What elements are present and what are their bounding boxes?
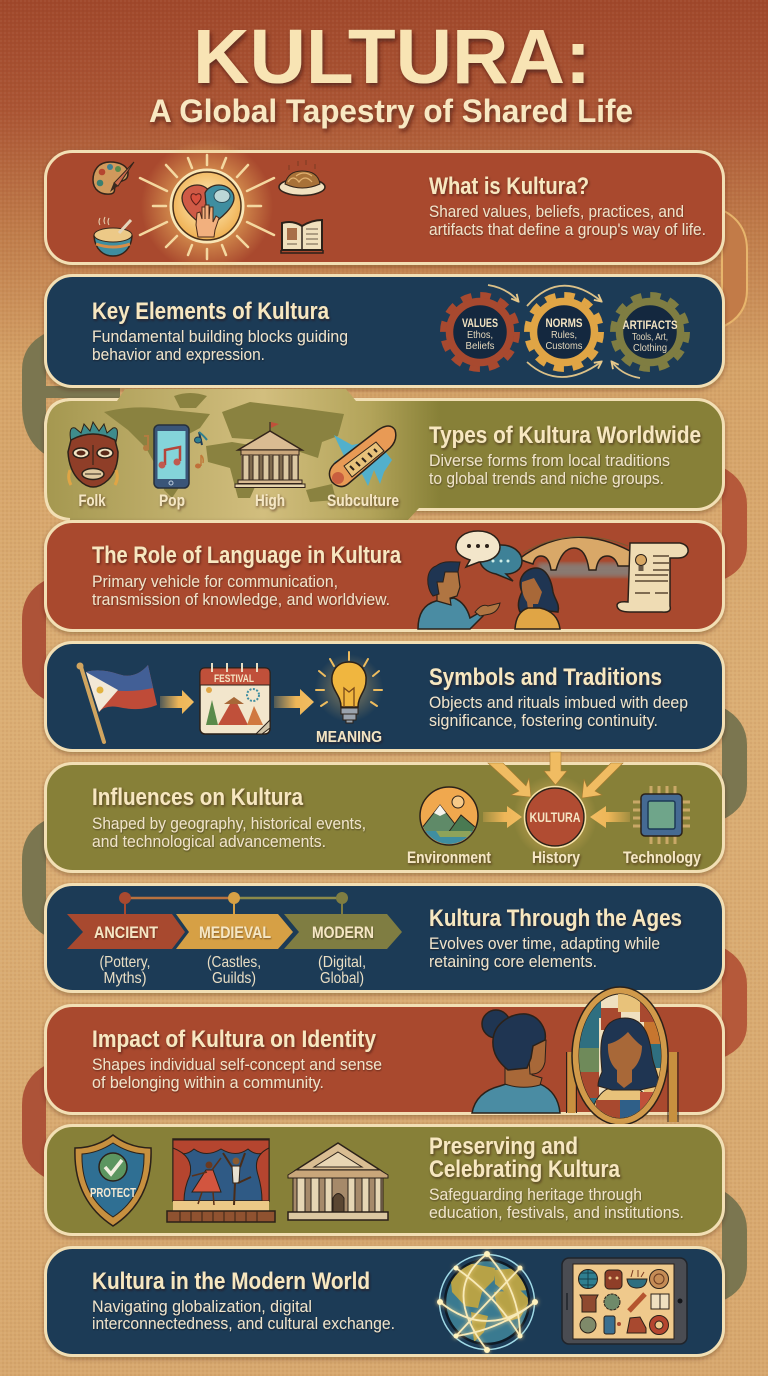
side ribbons <box>22 210 747 1301</box>
text: modern world: Kultura in the Modern World <box>92 1268 370 1295</box>
chevron: modern <box>284 914 402 949</box>
panel: influences <box>46 752 724 872</box>
icon: values gear: VALUES <box>462 316 498 330</box>
icon: philippine flag <box>76 662 157 742</box>
text: role of language: The Role of Language in Kultura <box>92 542 402 569</box>
icon: protect shield <box>75 1135 151 1226</box>
icon: scroll document <box>617 543 688 612</box>
era examples: Guilds) <box>212 970 256 987</box>
text: influences: Influences on Kultura <box>92 784 304 811</box>
text: influences: and technological advancements. <box>92 832 326 851</box>
text: types worldwide: Diverse forms from local traditions <box>429 451 670 470</box>
icon: artifacts gear: Tools, Art, <box>632 332 668 343</box>
panel: types worldwide <box>46 389 724 521</box>
icon: artifacts gear: ARTIFACTS <box>622 318 678 332</box>
icon: norms gear <box>527 295 601 369</box>
arrow: flag to festival <box>160 690 194 714</box>
chevron: medieval <box>176 914 293 949</box>
icon: networked globe <box>437 1251 538 1353</box>
text: role of language: transmission of knowledge, and worldview. <box>92 590 390 609</box>
chevron: modern: MODERN <box>312 923 374 942</box>
main title: KULTURA: <box>193 14 591 100</box>
era examples: (Pottery, <box>100 954 150 971</box>
world map <box>46 389 440 521</box>
text: role of language: Primary vehicle for communication, <box>92 572 338 591</box>
arrows: converging influences <box>488 752 623 798</box>
text: modern world <box>92 1268 395 1333</box>
labels: culture types <box>78 492 399 510</box>
text: preserving and celebrating <box>429 1133 684 1222</box>
labels: influences <box>407 849 702 867</box>
icon: light bulb with rays <box>315 652 383 723</box>
figure: woman listening <box>515 568 560 629</box>
text: types worldwide: to global trends and niche groups. <box>429 469 664 488</box>
text: modern world: interconnectedness, and cultural exchange. <box>92 1314 395 1333</box>
era examples: Global) <box>320 970 364 987</box>
icon: norms gear: Customs <box>546 341 582 352</box>
text: influences: Shaped by geography, historical events, <box>92 814 366 833</box>
timeline connector <box>119 892 348 915</box>
subtitle: A Global Tapestry of Shared Life <box>149 93 633 129</box>
era examples <box>100 954 366 987</box>
text: what is kultura <box>429 173 706 239</box>
icon: tablet with cultural apps <box>562 1258 687 1344</box>
labels: culture types: High <box>255 492 285 510</box>
text: impact on identity: Shapes individual self-concept and sense <box>92 1055 382 1074</box>
text: impact on identity <box>92 1026 382 1092</box>
text: preserving and celebrating: Preserving and <box>429 1133 578 1160</box>
text: impact on identity: of belonging within a community. <box>92 1073 324 1092</box>
text: types worldwide: Types of Kultura Worldwide <box>429 422 701 449</box>
icon: glowing heart and mind <box>140 140 274 272</box>
text: impact on identity: Impact of Kultura on Identity <box>92 1026 377 1053</box>
text: what is kultura: artifacts that define a group's way of life. <box>429 220 706 239</box>
icon: norms gear: NORMS <box>546 316 582 330</box>
icon: phone with music <box>143 425 207 488</box>
text: what is kultura: What is Kultura? <box>429 173 589 200</box>
era examples: (Castles, <box>207 954 261 971</box>
text: modern world: Navigating globalization, digital <box>92 1297 312 1316</box>
panel: preserving and celebrating <box>46 1126 724 1234</box>
arrow: festival to meaning <box>274 689 314 715</box>
icon: artifacts gear <box>613 295 687 369</box>
labels: culture types: Pop <box>159 492 185 510</box>
panel: through the ages <box>46 884 724 992</box>
icon: values gear: Beliefs <box>466 341 494 352</box>
text: through the ages: retaining core elements. <box>429 952 597 971</box>
text: symbols and traditions: significance, fostering continuity. <box>429 711 658 730</box>
panel: symbols and traditions <box>46 642 724 750</box>
icon: tribal mask <box>68 422 118 487</box>
text: preserving and celebrating: education, festivals, and institutions. <box>429 1203 684 1222</box>
icon: norms gear: Rules, <box>551 330 577 341</box>
text: influences <box>92 784 366 851</box>
labels: influences: History <box>532 849 581 867</box>
era examples: Myths) <box>104 970 146 987</box>
panel: impact on identity <box>46 987 724 1125</box>
icon: pasta plate <box>279 160 325 196</box>
icon: kultura center: KULTURA <box>530 810 581 825</box>
panel: role of language <box>46 522 724 630</box>
arrows: gear cycle <box>488 285 640 378</box>
title <box>149 14 633 129</box>
icon: artifacts gear: Clothing <box>633 343 667 354</box>
panel: modern world <box>46 1248 724 1356</box>
icon: festival calendar <box>200 663 270 734</box>
icon: museum <box>288 1143 388 1220</box>
text: role of language <box>92 542 402 609</box>
panel: key elements <box>46 276 724 386</box>
labels: influences: Technology <box>623 849 702 867</box>
labels: culture types: Folk <box>78 492 106 510</box>
icon: stone bridge <box>519 537 632 577</box>
text: key elements: Fundamental building blocks guiding <box>92 327 348 346</box>
icon: protect shield: PROTECT <box>90 1186 136 1200</box>
icon: environment <box>418 787 482 847</box>
text: through the ages <box>429 905 682 971</box>
text: what is kultura: Shared values, beliefs, practices, and <box>429 202 684 221</box>
text: key elements <box>92 298 348 364</box>
icon: stage with dancers <box>167 1139 275 1222</box>
chevron: ancient <box>67 914 185 949</box>
text: preserving and celebrating: Safeguarding heritage through <box>429 1185 642 1204</box>
figure: person seen from behind <box>472 1010 560 1113</box>
chevron: ancient: ANCIENT <box>94 923 159 942</box>
icon: speech bubbles <box>456 531 522 581</box>
icon: open book <box>281 220 323 253</box>
figure: man talking <box>418 562 500 629</box>
era examples: (Digital, <box>318 954 366 971</box>
icon: steaming bowl <box>94 217 132 256</box>
text: symbols and traditions <box>429 664 688 730</box>
icon: microchip <box>633 786 690 844</box>
text: types worldwide <box>429 422 701 488</box>
panel: what is kultura <box>46 140 724 272</box>
text: through the ages: Evolves over time, adapting while <box>429 934 660 953</box>
chevron: medieval: MEDIEVAL <box>199 923 271 942</box>
icon: skateboard with paint splash <box>329 426 396 487</box>
icon: values gear <box>443 295 517 369</box>
labels: influences: Environment <box>407 849 491 867</box>
figure: mirror with patchwork reflection <box>566 987 678 1125</box>
icon: values gear: Ethos, <box>467 330 493 341</box>
icon: kultura center <box>513 775 597 859</box>
text: preserving and celebrating: Celebrating Kultura <box>429 1156 621 1183</box>
icon: festival calendar: FESTIVAL <box>214 673 254 685</box>
labels: culture types: Subculture <box>327 492 399 510</box>
text: symbols and traditions: Objects and rituals imbued with deep <box>429 693 688 712</box>
text: key elements: behavior and expression. <box>92 345 265 364</box>
text: through the ages: Kultura Through the Ages <box>429 905 682 932</box>
text: symbols and traditions: Symbols and Traditions <box>429 664 662 691</box>
icon: palette <box>93 162 134 194</box>
text: key elements: Key Elements of Kultura <box>92 298 330 325</box>
icon: classical building <box>235 422 305 488</box>
label: meaning: MEANING <box>316 729 382 746</box>
arrows: side influences <box>483 806 630 828</box>
